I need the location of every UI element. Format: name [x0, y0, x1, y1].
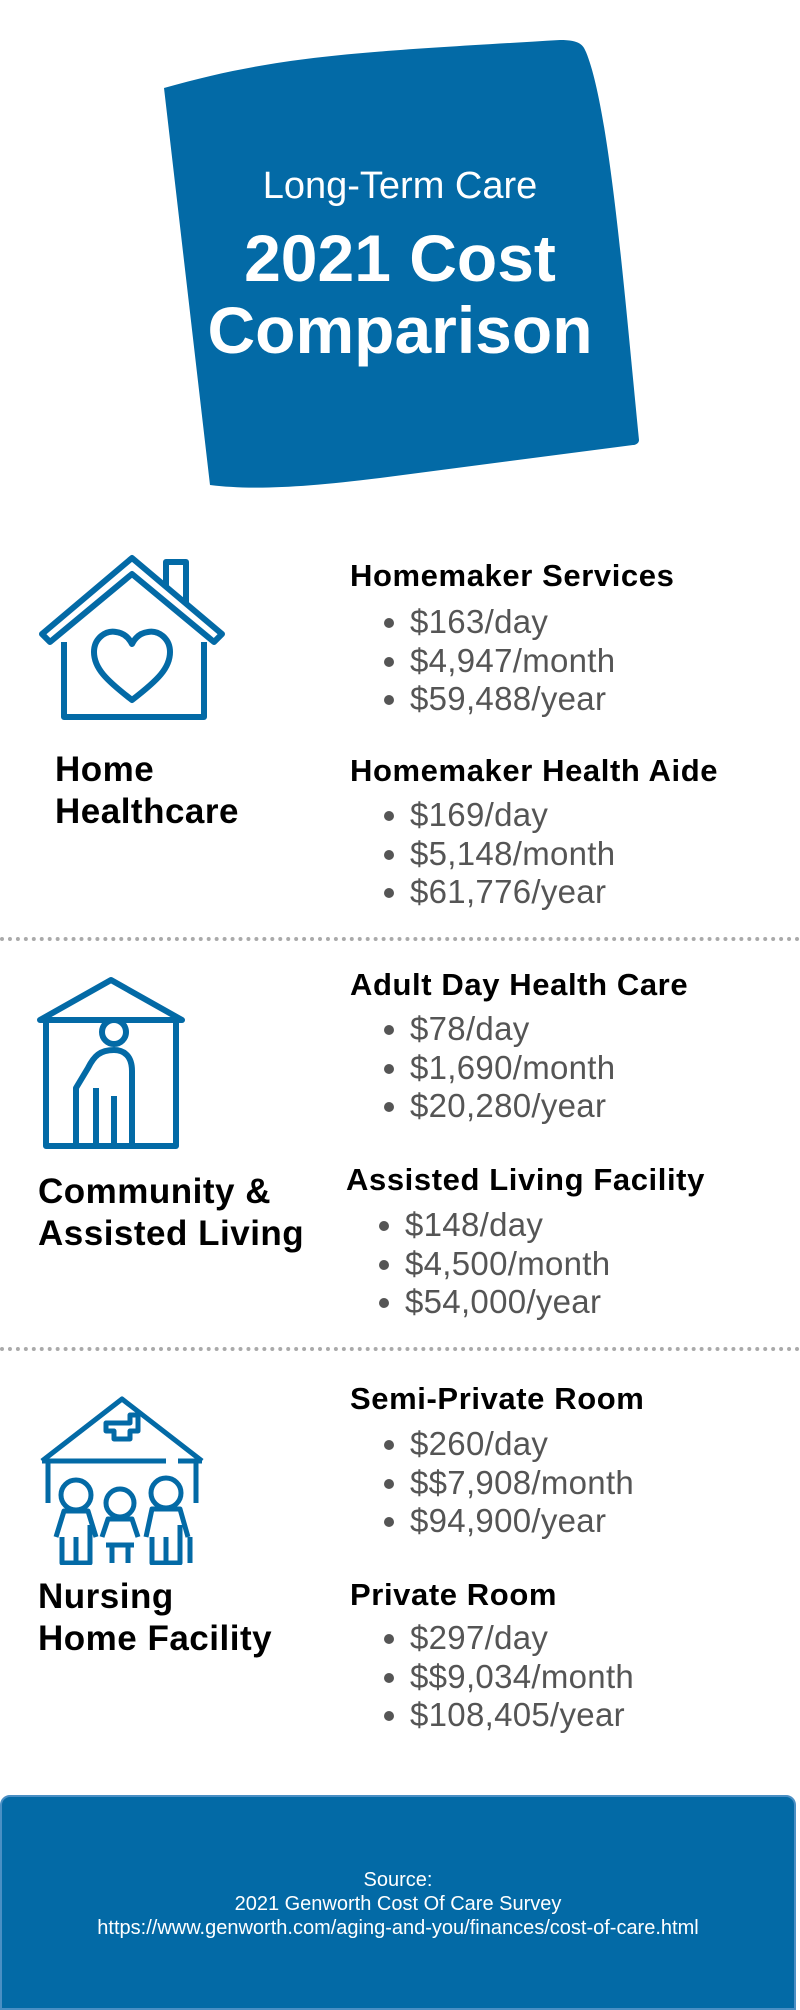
category: community & assisted living [38, 1172, 304, 1253]
list: homemaker services [384, 603, 615, 717]
heading: homemaker health aide: Homemaker Health Aide [350, 753, 718, 788]
list: adult day health care: $1,690/month [410, 1048, 615, 1086]
category: community & assisted living: Community & [38, 1172, 271, 1211]
list: adult day health care [384, 1010, 615, 1124]
footer: source: Source: [364, 1869, 432, 1891]
list: homemaker health aide [384, 796, 615, 910]
list: private room: $297/day [410, 1619, 548, 1656]
list: homemaker services: $4,947/month [410, 642, 615, 678]
category: nursing home facility: Home Facility [38, 1619, 272, 1658]
category: home healthcare: Home [55, 750, 154, 789]
list: homemaker health aide: $5,148/month [410, 834, 615, 872]
list: private room: $$9,034/month [410, 1658, 634, 1694]
footer: source: 2021 Genworth Cost Of Care Survey [235, 1893, 561, 1915]
main title: 2021 Cost [244, 221, 556, 295]
main title [207, 221, 593, 367]
list: semi-private room: $$7,908/month [410, 1464, 634, 1500]
category: nursing home facility: Nursing [38, 1577, 174, 1616]
list: semi-private room: $94,900/year [410, 1502, 606, 1539]
list: homemaker services: $163/day [410, 603, 548, 640]
list: semi-private room [384, 1425, 634, 1539]
category: community & assisted living: Assisted Living [38, 1214, 304, 1253]
icon: nursing home with residents [40, 1396, 204, 1565]
category: home healthcare [55, 750, 239, 831]
footer: source [0, 1795, 796, 2010]
heading: semi-private room: Semi-Private Room [350, 1381, 644, 1416]
category: home healthcare: Healthcare [55, 792, 239, 831]
list: homemaker health aide: $61,776/year [410, 873, 606, 910]
title banner [164, 40, 639, 488]
list: private room: $108,405/year [410, 1696, 625, 1733]
list: assisted living facility: $148/day [405, 1206, 543, 1243]
subtitle: Long-Term Care [263, 165, 537, 207]
list: private room [384, 1619, 634, 1733]
list: adult day health care: $78/day [410, 1010, 530, 1047]
heading: private room: Private Room [350, 1577, 557, 1612]
main title: Comparison [207, 293, 593, 367]
list: homemaker health aide: $169/day [410, 796, 548, 833]
heading: homemaker services: Homemaker Services [350, 558, 674, 593]
list: semi-private room: $260/day [410, 1425, 548, 1462]
category: nursing home facility [38, 1577, 272, 1658]
list: assisted living facility [379, 1206, 610, 1320]
list: assisted living facility: $54,000/year [405, 1283, 601, 1320]
heading: adult day health care: Adult Day Health Care [350, 967, 688, 1002]
icon: community house with person [37, 977, 185, 1149]
list: adult day health care: $20,280/year [410, 1087, 606, 1124]
footer: source: https://www.genworth.com/aging-and-you/finances/cost-of-care.html [97, 1917, 699, 1939]
list: assisted living facility: $4,500/month [405, 1244, 610, 1282]
list: homemaker services: $59,488/year [410, 680, 606, 717]
heading: assisted living facility: Assisted Living Facility [346, 1162, 705, 1197]
icon: house with heart [39, 554, 225, 720]
